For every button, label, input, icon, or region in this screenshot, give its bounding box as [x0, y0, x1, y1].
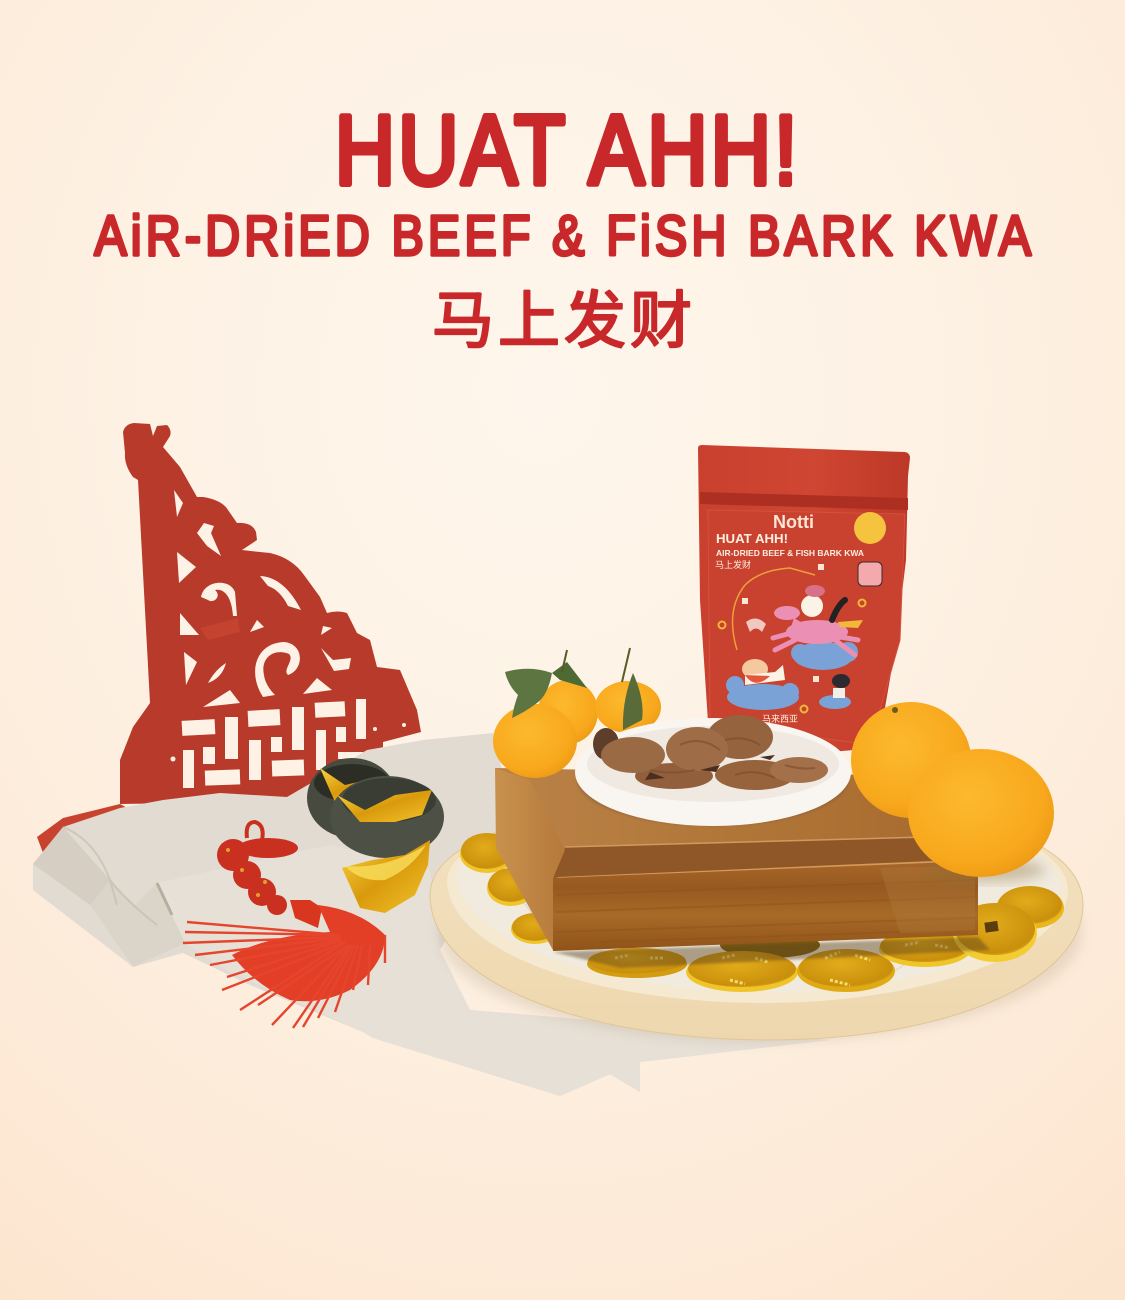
tassel cap — [290, 900, 322, 928]
pouch subtitle: AIR-DRIED BEEF & FISH BARK KWA — [716, 548, 864, 558]
pouch title: HUAT AHH! — [716, 531, 788, 546]
back bowl — [307, 758, 397, 838]
wooden block — [495, 768, 990, 968]
orange shadow — [925, 858, 1045, 882]
cloth front layer — [157, 845, 830, 1096]
gold badge — [854, 512, 886, 544]
gold ingots in dark bowls — [307, 758, 444, 913]
fan — [746, 618, 766, 632]
tray shadow — [438, 822, 1082, 1042]
cloth folds — [63, 827, 157, 925]
fishing line — [732, 568, 815, 650]
bark chips — [593, 715, 828, 790]
tray rim — [430, 800, 1083, 1040]
horse — [773, 606, 863, 655]
knot gold flecks — [226, 848, 267, 897]
gold coins — [460, 833, 1064, 992]
leaves — [505, 648, 643, 730]
big oranges — [851, 702, 1054, 882]
small cow — [832, 674, 850, 698]
tassel strands — [183, 922, 385, 1028]
block bevel — [553, 836, 978, 878]
felt cut-outs — [170, 490, 406, 788]
small cloud — [819, 695, 851, 709]
block front — [553, 861, 978, 951]
dog on cloud — [742, 659, 785, 685]
cloud: under horse — [791, 642, 858, 670]
tray inner lip — [447, 805, 1068, 1003]
felt fold — [200, 618, 240, 640]
red fabric strip — [37, 804, 140, 858]
knot — [217, 822, 298, 915]
pouch zip — [700, 492, 908, 510]
loose ingot — [342, 840, 430, 913]
lantern — [858, 562, 882, 586]
white bowl — [575, 715, 851, 826]
cat rider — [801, 585, 845, 620]
block top — [495, 768, 978, 868]
pouch — [698, 445, 910, 752]
block side — [495, 768, 565, 950]
red knot and tassel — [183, 822, 385, 1028]
coins on pouch — [718, 600, 866, 712]
linen cloth — [33, 733, 830, 1096]
title: Huat Ahh: HUAT AHH! — [335, 97, 797, 206]
decor dots — [742, 564, 824, 682]
tray mat — [457, 810, 1060, 992]
subtitle: product name: AiR-DRiED BEEF & FiSH BARK KWA — [94, 204, 1032, 268]
tray — [430, 800, 1083, 1042]
block shadow — [553, 937, 990, 968]
chinese title: 马上发财 — [432, 270, 692, 360]
tassel body — [232, 905, 385, 1001]
felt ornament — [120, 423, 421, 804]
pouch chinese label: 马来西亚 — [762, 712, 798, 725]
title block — [94, 97, 1032, 360]
cloth back layer shading — [33, 827, 117, 905]
front bowl — [330, 776, 444, 858]
cloud: under dog — [726, 676, 799, 710]
pouch chinese title: 马上发财 — [715, 558, 751, 571]
small oranges — [493, 648, 661, 778]
brand: Notti: Notti — [773, 512, 814, 532]
